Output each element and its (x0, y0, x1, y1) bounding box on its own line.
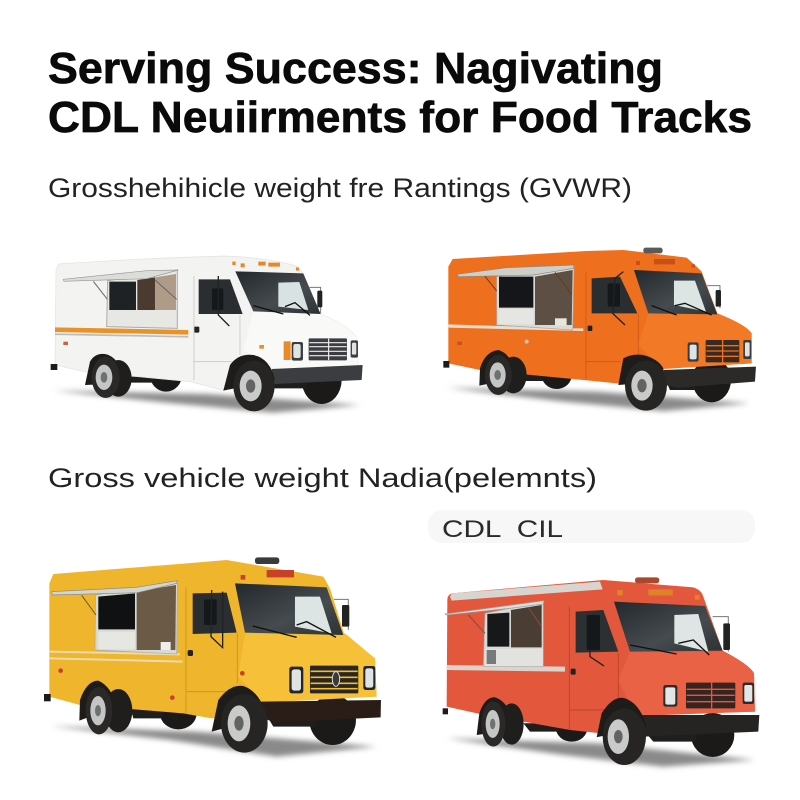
label: CDL pill (428, 510, 755, 543)
subtitle: lower row heading: Gross vehicle weight Nadia(pelemnts) (48, 463, 597, 493)
truck: yellow (44, 557, 381, 757)
truck: white (51, 256, 363, 413)
subtitle: top row heading: Grosshehihicle weight fre Rantings (GVWR) (48, 173, 632, 203)
title (48, 44, 752, 142)
title: Serving Success: Nagivating (48, 44, 663, 93)
title: CDL Neuiirments for Food Tracks (48, 93, 752, 142)
truck: red (443, 577, 759, 767)
label: CDL pill: CDL CIL (442, 516, 563, 543)
truck: orange (443, 248, 756, 411)
